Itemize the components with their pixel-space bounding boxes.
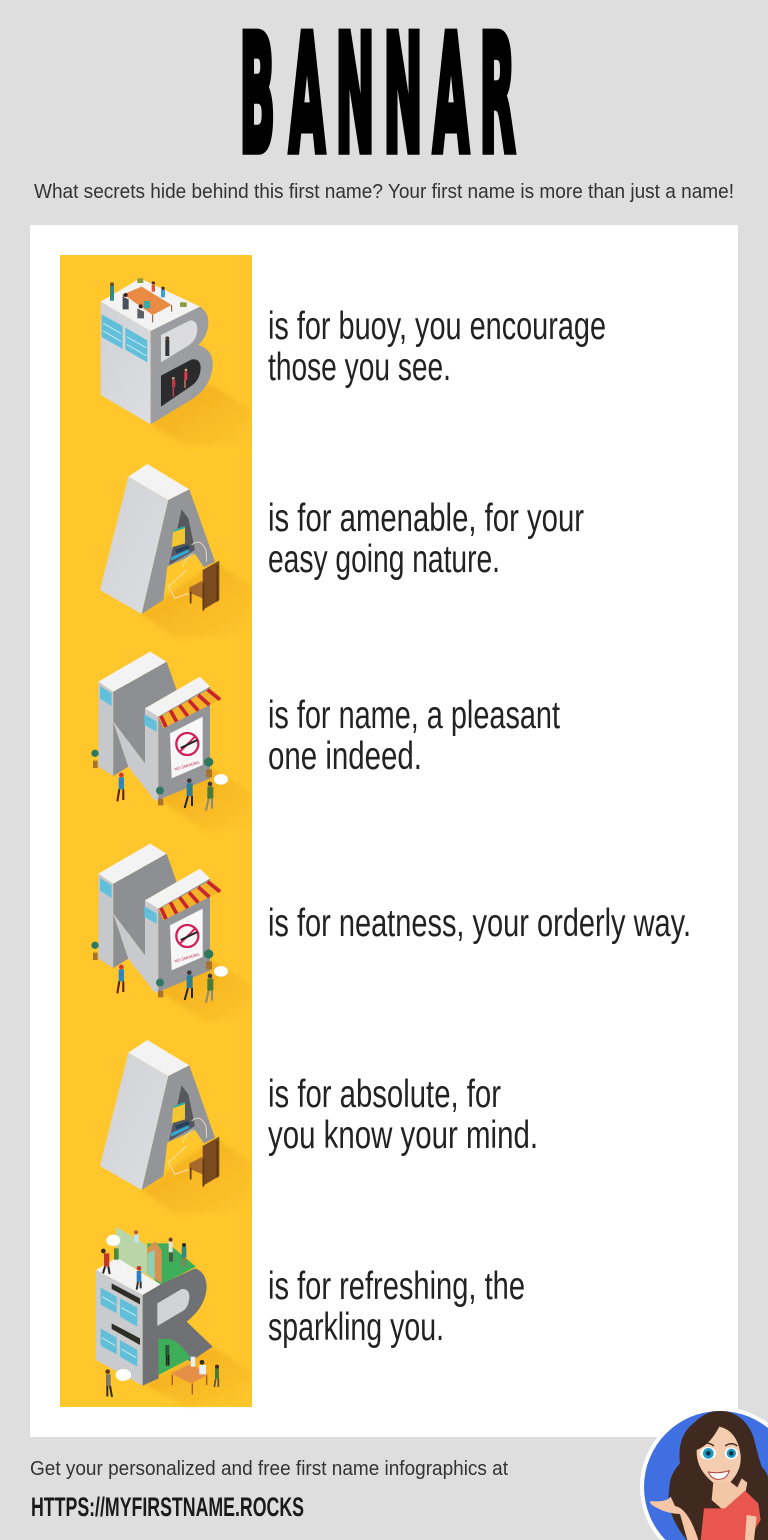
panel: white card xyxy=(30,225,738,1437)
icon: letter N building repeat: NO SMOKING xyxy=(174,952,200,964)
text block: second A line xyxy=(268,1073,538,1157)
text block: A line xyxy=(268,497,584,581)
text block: R line xyxy=(268,1265,525,1349)
icon: letter B building xyxy=(101,278,252,446)
text block: second A line: you know your mind. xyxy=(268,1114,538,1157)
icon: letter R building xyxy=(96,1227,252,1405)
icon: letter A building repeat xyxy=(100,1040,252,1215)
title: BANNAR xyxy=(240,2,515,188)
footer url: HTTPS://MYFIRSTNAME.ROCKS xyxy=(31,1492,304,1522)
icon: letter N building xyxy=(91,652,252,832)
text block: N line xyxy=(268,694,560,778)
text block: R line: sparkling you. xyxy=(268,1306,444,1349)
text block: N line: is for name, a pleasant xyxy=(268,694,560,737)
footer text: Get your personalized and free first name infographics at xyxy=(30,1458,508,1480)
icon: letter N building repeat xyxy=(91,844,252,1022)
text block: second A line: is for absolute, for xyxy=(268,1073,501,1116)
text block: A line: easy going nature. xyxy=(268,538,500,581)
text block: B line: is for buoy, you encourage xyxy=(268,305,606,348)
text block: R line: is for refreshing, the xyxy=(268,1265,525,1308)
icon: letter N building: NO SMOKING xyxy=(174,760,200,772)
panel: yellow icon column xyxy=(60,255,252,1407)
icon: letter A building xyxy=(100,464,252,639)
text block: N line: one indeed. xyxy=(268,735,422,778)
avatar: woman in circle xyxy=(640,1407,768,1540)
text block: B line: those you see. xyxy=(268,346,451,389)
subtitle: What secrets hide behind this first name? Your first name is more than just a name! xyxy=(34,181,734,203)
text block: B line xyxy=(268,305,606,389)
text block: A line: is for amenable, for your xyxy=(268,497,584,540)
